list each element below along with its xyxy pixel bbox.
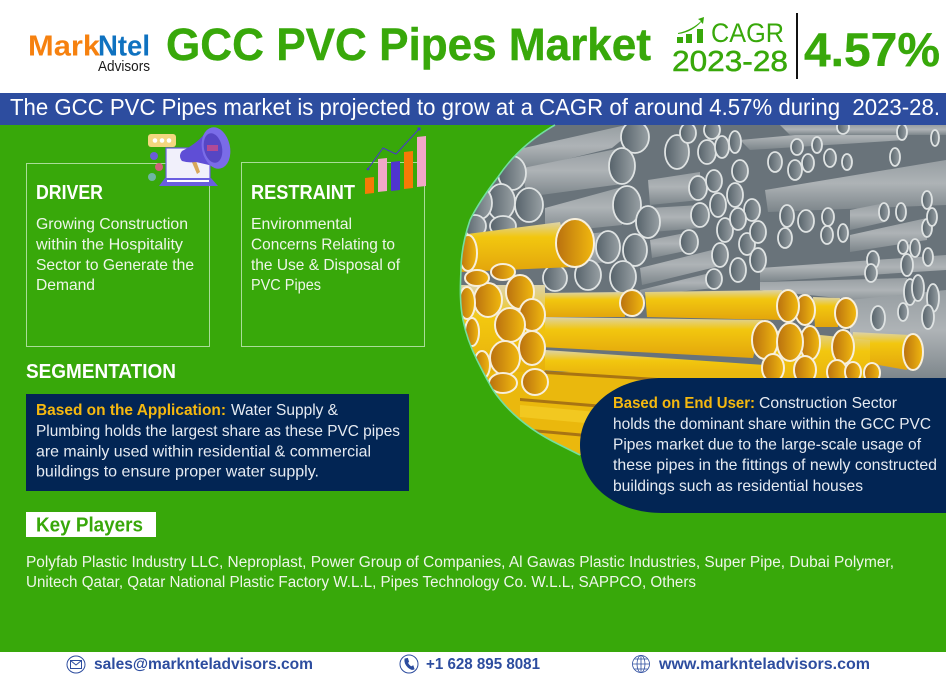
key players list: Polyfab Plastic Industry LLC, Neproplast, Power Group of Companies, Al Gawas Plastic Industries, Super Pipe, Dubai Polymer, bbox=[26, 554, 894, 571]
panel: based on end user: Based on End User: bbox=[613, 395, 755, 412]
driver text: Demand bbox=[36, 277, 95, 294]
icon: phone bbox=[400, 655, 418, 673]
restraint text: Concerns Relating to bbox=[251, 236, 395, 254]
panel: based on end user: these pipes in the fittings of newly constructed bbox=[613, 457, 937, 474]
icon: email bbox=[67, 656, 85, 673]
icon: rising bar chart bbox=[365, 128, 426, 194]
gray pipe bodies bbox=[515, 125, 946, 380]
footer bbox=[0, 652, 946, 674]
CAGR label: CAGR bbox=[711, 18, 784, 48]
key players list bbox=[26, 554, 894, 591]
driver text bbox=[35, 216, 194, 294]
panel: based on the application bbox=[26, 394, 409, 491]
CAGR value: 4.57% bbox=[804, 23, 940, 76]
panel: based on the application: Plumbing holds the largest share as these PVC pipes bbox=[36, 423, 400, 440]
restraint heading: RESTRAINT bbox=[251, 182, 355, 204]
segmentation heading: SEGMENTATION bbox=[26, 361, 176, 383]
logo: MarkNtel Advisors: Mark bbox=[28, 30, 101, 62]
panel: based on end user: Construction Sector bbox=[759, 395, 898, 412]
panel: based on end user: Pipes market due to the large-scale usage of bbox=[613, 437, 922, 454]
panel: based on the application: Based on the Application: bbox=[36, 402, 226, 419]
icon: globe bbox=[632, 656, 650, 672]
panel: based on the application: are mainly used within residential & commercial bbox=[36, 444, 371, 461]
panel: restraint bbox=[242, 162, 424, 346]
restraint text: the Use & Disposal of bbox=[251, 257, 401, 274]
panel: driver bbox=[26, 164, 210, 346]
gray pipe ends bbox=[464, 120, 939, 330]
phone number: +1 628 895 8081 bbox=[426, 656, 540, 673]
CAGR block bbox=[672, 13, 940, 79]
email address: sales@marknteladvisors.com bbox=[94, 656, 313, 673]
driver text: Growing Construction bbox=[36, 216, 188, 233]
photo: stacked PVC pipes bbox=[455, 120, 946, 482]
icon: laptop with megaphone bbox=[148, 125, 234, 186]
panel: based on end user: holds the dominant share within the GCC PVC bbox=[613, 416, 931, 433]
panel: based on end user: buildings such as residential houses bbox=[613, 478, 863, 495]
key players heading: Key Players bbox=[36, 515, 143, 537]
subtitle band: The GCC PVC Pipes market is projected to grow at a CAGR of around 4.57% during 2023-28. bbox=[10, 94, 940, 120]
logo: MarkNtel Advisors: Advisors bbox=[98, 59, 150, 75]
driver text: within the Hospitality bbox=[35, 236, 183, 254]
logo: MarkNtel Advisors bbox=[28, 30, 150, 75]
driver heading: DRIVER bbox=[36, 182, 103, 204]
yellow pipe ends bbox=[459, 219, 923, 395]
divider bbox=[796, 13, 798, 79]
panel: based on the application: Water Supply & bbox=[231, 402, 338, 419]
website: www.marknteladvisors.com bbox=[658, 656, 870, 673]
green main panel bbox=[0, 125, 946, 652]
forecast period: 2023-28 bbox=[672, 46, 788, 78]
icon: growth chart bbox=[677, 17, 704, 43]
restraint text: Environmental bbox=[251, 216, 352, 233]
driver text: Sector to Generate the bbox=[36, 257, 194, 274]
white header background bbox=[0, 0, 946, 93]
yellow pipe bodies bbox=[461, 222, 908, 456]
title: GCC PVC Pipes Market bbox=[166, 19, 651, 70]
panel: based on end user bbox=[580, 378, 946, 513]
logo: MarkNtel Advisors: Ntel bbox=[98, 30, 150, 62]
restraint text: PVC Pipes bbox=[251, 277, 321, 294]
key players list: Unitech Qatar, Qatar National Plastic Factory W.L.L, Pipes Technology Co. W.L.L, SAPPCO, Others bbox=[26, 574, 696, 591]
restraint text bbox=[251, 216, 401, 294]
panel: based on the application: buildings to ensure proper water supply. bbox=[36, 464, 319, 481]
